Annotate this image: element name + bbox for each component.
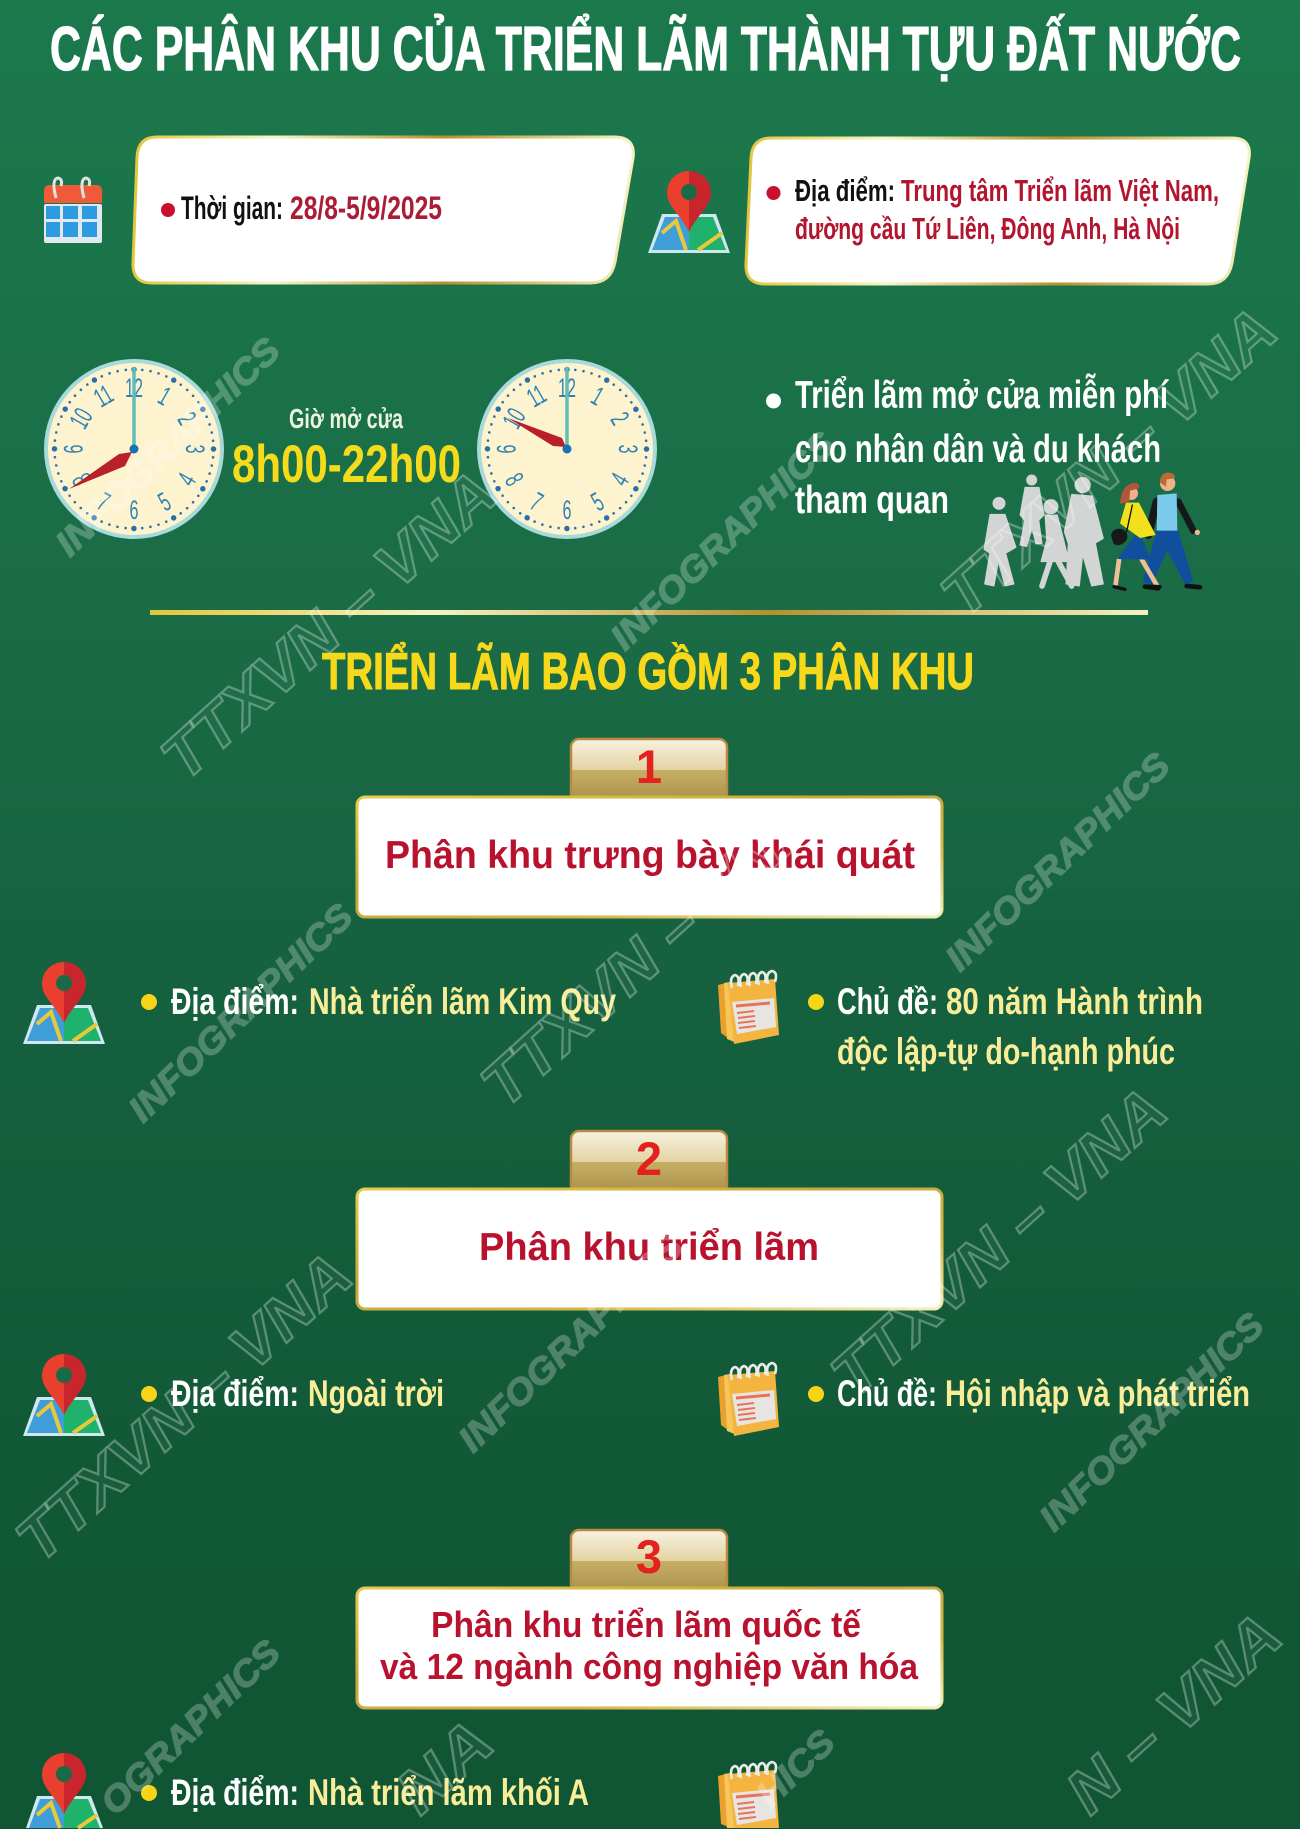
clock: 8h00: 4 <box>171 468 202 491</box>
section 3 location: Nhà triển lãm khối A <box>308 1772 589 1813</box>
clock: 22h00: 5 <box>586 486 609 517</box>
clock: 8h00: 12 <box>125 373 143 403</box>
section 1 theme <box>808 981 1203 1072</box>
icon: map pin <box>648 171 730 253</box>
section 2 title: Phân khu triển lãm <box>479 1226 819 1269</box>
icon: section 3 theme <box>718 1762 779 1828</box>
section 1 location: Nhà triển lãm Kim Quy <box>309 981 616 1022</box>
section 2 theme <box>808 1373 1250 1414</box>
bullet <box>766 186 780 200</box>
watermarks: TTXVN – VNA <box>928 295 1290 630</box>
clock: 22h00: 1 <box>586 381 609 411</box>
section 2 tab <box>571 1131 727 1193</box>
icon: section 1 theme <box>718 971 779 1044</box>
time text: Thời gian: <box>181 190 283 226</box>
watermarks: INFOGRAPHICS <box>602 423 843 658</box>
free entry text <box>766 373 1169 522</box>
clock: 8h00: 11 <box>89 379 118 413</box>
opening hours value: 8h00-22h00 <box>232 435 461 494</box>
clock: 22h00: 3 <box>613 444 643 454</box>
clock: 8h00: 1 <box>153 381 176 411</box>
clock: 22h00: 12 <box>558 373 576 403</box>
watermarks: TTXVN – VNA <box>3 1240 365 1575</box>
illustration: visitors <box>984 473 1200 589</box>
section 1 title <box>357 797 942 917</box>
section 3 location: Địa điểm: <box>171 1772 299 1813</box>
watermarks: TTXVN – VNA <box>148 458 510 793</box>
section 1 location <box>141 981 616 1022</box>
clock: 8h00: 8 <box>66 468 97 491</box>
clock: 22h00: 9 <box>491 444 521 454</box>
watermarks: TTXVN – VNA <box>818 1075 1180 1410</box>
section 1 location: Địa điểm: <box>171 981 299 1022</box>
clock: 8h00 <box>46 361 222 537</box>
clock: 8h00: 2 <box>172 407 202 430</box>
icon: section 1 location <box>23 962 105 1044</box>
bullet <box>161 203 175 217</box>
free entry text: cho nhân dân và du khách <box>795 428 1161 471</box>
clock: 22h00: 6 <box>562 495 572 525</box>
section 3 location <box>141 1772 589 1813</box>
panel: location <box>746 138 1249 284</box>
section 1 theme: 80 năm Hành trình <box>946 981 1203 1022</box>
clock: 22h00: 11 <box>522 379 551 413</box>
clock: 22h00: 2 <box>605 407 635 430</box>
icon: section 2 location <box>23 1354 105 1436</box>
section 3 title <box>357 1588 942 1708</box>
section 3 title: và 12 ngành công nghiệp văn hóa <box>380 1646 919 1687</box>
watermarks: NA <box>383 1707 507 1827</box>
panel: time <box>133 137 633 283</box>
clock: 8h00: 5 <box>153 486 176 517</box>
watermarks: N – VNA <box>1053 1600 1295 1827</box>
icon: section 2 theme <box>718 1363 779 1436</box>
section 1 theme: độc lập-tự do-hạnh phúc <box>837 1031 1175 1072</box>
watermarks: INFOGRAPHICS <box>450 1225 691 1460</box>
watermarks: INFOGRAPHICS <box>1031 1304 1272 1539</box>
clock: 8h00: 6 <box>129 495 139 525</box>
clock: 8h00: 3 <box>180 444 210 454</box>
watermarks: INFOGRAPHICS <box>937 744 1178 979</box>
section 2 title <box>357 1189 942 1309</box>
clock: 22h00: 7 <box>525 486 548 517</box>
subheading: TRIỂN LÃM BAO GỒM 3 PHÂN KHU <box>322 642 974 701</box>
section 2 location <box>141 1373 444 1414</box>
section 1 theme: Chủ đề: <box>837 981 938 1022</box>
clock: 8h00: 7 <box>92 486 115 517</box>
watermarks: INFOGRAPHICS <box>47 329 288 564</box>
section 1 title: Phân khu trưng bày khái quát <box>385 834 915 877</box>
section 2 location: Ngoài trời <box>308 1373 444 1414</box>
section 3 tab <box>571 1530 727 1592</box>
number 3: 3 <box>636 1530 662 1583</box>
section 1 tab <box>571 739 727 801</box>
icon: section 3 location <box>26 1753 103 1828</box>
time text: 28/8-5/9/2025 <box>290 190 442 226</box>
location label: Địa điểm: <box>795 173 895 208</box>
free entry text: Triển lãm mở cửa miễn phí <box>795 373 1169 417</box>
number 1: 1 <box>636 740 662 793</box>
watermarks: TTXVN – VNA <box>468 785 830 1120</box>
clock: 22h00: 4 <box>604 468 635 491</box>
clock: 22h00: 8 <box>499 468 530 491</box>
section 3 title: Phân khu triển lãm quốc tế <box>431 1604 862 1645</box>
clock: 22h00: 10 <box>496 403 532 434</box>
watermarks: OGRAPHICS <box>92 1631 288 1823</box>
watermarks: HICS <box>748 1721 843 1815</box>
divider: gold rule <box>150 610 1148 615</box>
free entry text: tham quan <box>795 479 949 522</box>
clock: 8h00: 10 <box>63 403 99 434</box>
clock: 8h00: 9 <box>58 444 88 454</box>
section 2 theme: Chủ đề: <box>837 1373 937 1414</box>
icon: calendar <box>44 178 102 243</box>
opening hours label: Giờ mở cửa <box>289 403 403 434</box>
clock: 22h00 <box>479 361 655 537</box>
section 2 location: Địa điểm: <box>171 1373 299 1414</box>
number 2: 2 <box>636 1132 662 1185</box>
watermarks: INFOGRAPHICS <box>120 895 361 1130</box>
